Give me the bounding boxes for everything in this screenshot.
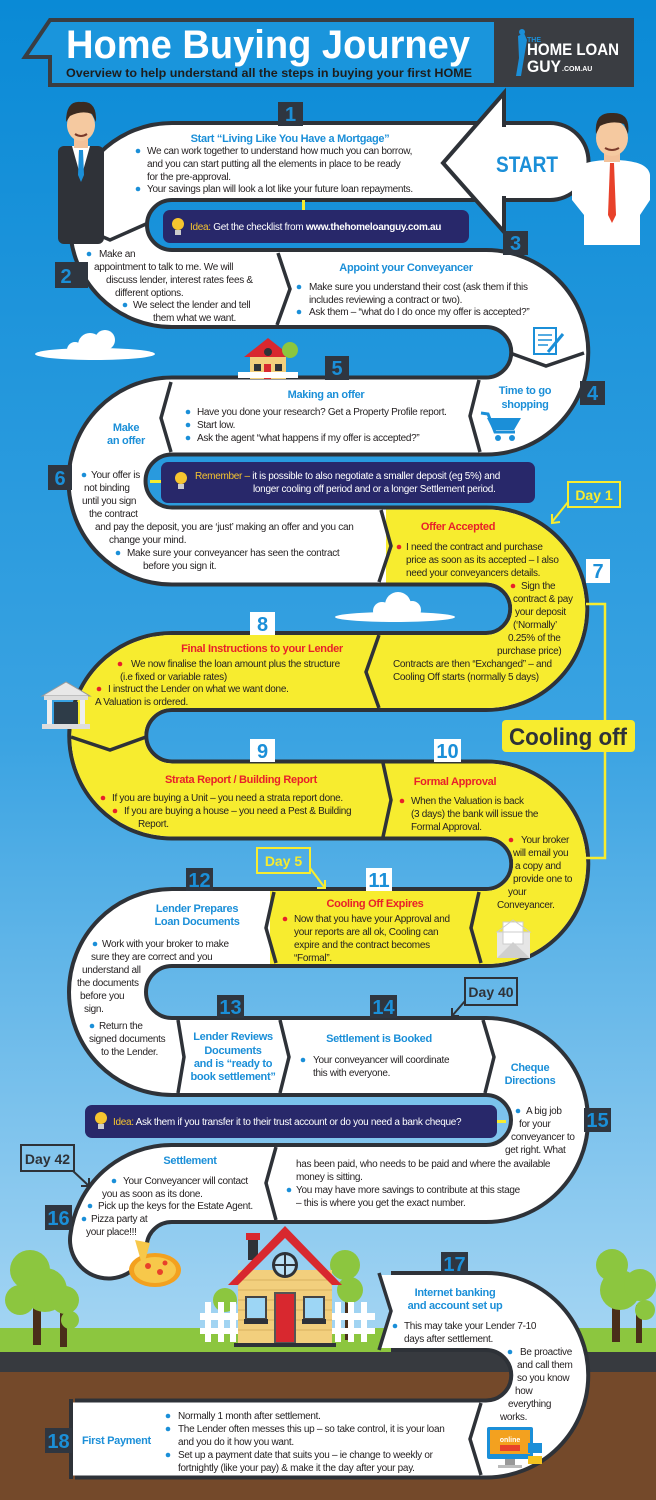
step 7 text: offer accepted: (‘Normally’ — [513, 620, 557, 631]
logo: the home loan guy: .COM.AU — [562, 66, 592, 73]
step 15 text: A big job — [526, 1106, 562, 1117]
number tags: 7 — [592, 561, 604, 583]
number tags: 13 — [219, 997, 242, 1019]
step 5 text: Ask the agent “what happens if my offer is accepted?” — [197, 433, 419, 444]
step 6 text: change your mind. — [109, 535, 186, 546]
step 18 text: Normally 1 month after settlement. — [178, 1411, 321, 1422]
ground: grass, road and soil — [0, 1328, 656, 1500]
step 3 text: Ask them – “what do I do once my offer is accepted?” — [309, 307, 529, 318]
step 17 text: so you know — [517, 1373, 570, 1384]
step 7 text: offer accepted: price as soon as its accepted – I also — [406, 555, 559, 566]
icon: house with fence — [200, 1226, 375, 1347]
icon: pizza — [129, 1240, 181, 1287]
step 2 text: Make an — [99, 249, 135, 260]
step 2 text: discuss lender, interest rates fees & — [106, 275, 253, 286]
subtitle: Overview to help understand all the steps in buying your first HOME — [66, 66, 472, 80]
icon: bank — [42, 682, 90, 729]
step 12 text: to the Lender. — [101, 1047, 158, 1058]
step 12 text: signed documents — [89, 1034, 166, 1045]
icon: shopping cart — [481, 413, 521, 441]
step 16 text: Pizza party at — [91, 1214, 148, 1225]
number tags: 8 — [257, 614, 268, 636]
step 18 text: and you do it how you want. — [178, 1437, 294, 1448]
number tags: 4 — [587, 383, 599, 405]
step 9 text: If you are buying a Unit – you need a strata report done. — [112, 793, 343, 804]
step 17 text: how — [515, 1386, 534, 1397]
step 12 text: Return the — [99, 1021, 143, 1032]
icon: online pay monitor: online — [500, 1437, 520, 1444]
START arrow — [443, 93, 558, 232]
idea box 2 — [85, 1105, 506, 1138]
step 6 text: before you sign it. — [143, 561, 216, 572]
step 12 text: sign. — [84, 1004, 104, 1015]
header banner — [25, 20, 632, 85]
step 11 text — [283, 898, 450, 964]
step 1 text: Start “Living Like You Have a Mortgage” — [191, 133, 389, 145]
step 13 text: Lender Reviews — [193, 1031, 273, 1043]
number tags: 18 — [47, 1431, 70, 1453]
winding road — [69, 162, 584, 1479]
step 7 text: offer accepted: Sign the — [521, 581, 556, 592]
step 3 text — [297, 262, 529, 318]
step 12 text: Work with your broker to make — [102, 939, 229, 950]
cooling off bracket — [502, 604, 635, 858]
step 2 text: them what we want. — [153, 313, 236, 324]
make an offer label: Make — [113, 422, 139, 434]
step 4 label: shopping — [501, 399, 549, 411]
step 11 text: Now that you have your Approval and — [294, 914, 450, 925]
number tags: 9 — [257, 741, 268, 763]
remember box — [150, 462, 535, 503]
step 10 text: Formal Approval. — [411, 822, 482, 833]
step 6 text: and pay the deposit, you are ‘just’ making an offer and you can — [95, 522, 354, 533]
step 9 text — [101, 774, 351, 830]
step 18 text: Set up a payment date that suits you – ie change to weekly or — [178, 1450, 434, 1461]
step 12 text: Lender Prepares — [156, 903, 238, 915]
number tags: 15 — [586, 1110, 609, 1132]
step 10 text: a copy and — [515, 861, 561, 872]
step 8 text: Final Instructions to your Lender — [181, 643, 344, 655]
step 11 text: expire and the contract becomes — [294, 940, 430, 951]
step 10 text: (3 days) the bank will issue the — [411, 809, 539, 820]
step 15 text: for your — [519, 1119, 551, 1130]
step 10 text: provide one to — [513, 874, 573, 885]
logo: the home loan guy: HOME LOAN — [527, 40, 619, 59]
step 3 text: Appoint your Conveyancer — [339, 262, 474, 274]
step 6 text — [82, 470, 354, 572]
step 1 text — [136, 133, 413, 195]
step 15 text: has been paid, who needs to be paid and where the available — [296, 1159, 551, 1170]
step 12 text: Loan Documents — [154, 916, 240, 928]
step 17 text: and call them — [517, 1360, 573, 1371]
START arrow: START — [496, 152, 558, 177]
step 2 text: appointment to talk to me. We will — [94, 262, 233, 273]
idea box 2: Idea: Ask them if you transfer it to their trust account or do you need a bank cheque? — [113, 1117, 462, 1128]
step 15 heading: Cheque — [511, 1062, 549, 1074]
trees — [5, 1249, 656, 1347]
step 13 text: Documents — [204, 1045, 262, 1057]
step 10 text: your — [508, 887, 527, 898]
step 8 text — [95, 643, 344, 708]
day callouts: Day 42 — [25, 1151, 70, 1167]
step 10 text: Formal Approval — [414, 776, 496, 788]
step 16 text: Settlement — [163, 1155, 217, 1167]
step 10 text: Your broker — [521, 835, 570, 846]
step 16 text: you as soon as its done. — [102, 1189, 203, 1200]
step 7 text: offer accepted: your deposit — [515, 607, 566, 618]
number tags: 10 — [436, 741, 459, 763]
day callouts — [21, 482, 620, 1186]
logo: the home loan guy — [516, 29, 619, 76]
step 18 text: fortnightly (like your pay) & make it the day after your pay. — [178, 1463, 415, 1474]
step 6 text: Your offer is — [91, 470, 140, 481]
day callouts: Day 1 — [575, 487, 613, 503]
step 5 text: Have you done your research? Get a Property Profile report. — [197, 407, 447, 418]
step 18 text: First Payment — [82, 1435, 151, 1447]
step 17 text: Be proactive — [520, 1347, 573, 1358]
step 9 text: Strata Report / Building Report — [165, 774, 318, 786]
step 7 text: offer accepted: 0.25% of the — [508, 633, 561, 644]
step 5 text: Start low. — [197, 420, 235, 431]
step 2 text — [87, 249, 253, 324]
number tags: 17 — [443, 1254, 466, 1276]
step 11 text: your reports are all ok, Cooling can — [294, 927, 438, 938]
number tags: 6 — [54, 468, 66, 490]
step 5 text — [186, 389, 447, 444]
remember box: Remember – it is possible to also negotiate a smaller deposit (eg 5%) and — [195, 471, 500, 482]
step 12 text: the documents — [77, 978, 139, 989]
icon: envelope — [497, 920, 530, 958]
icon: document with pen — [534, 328, 563, 354]
step 6 text: Make sure your conveyancer has seen the contract — [127, 548, 340, 559]
step 6 text: until you sign — [82, 496, 136, 507]
number tags: 16 — [47, 1208, 70, 1230]
step 3 text: includes reviewing a contract or two). — [309, 295, 462, 306]
step 2 text: different options. — [115, 288, 183, 299]
number tags: 14 — [372, 997, 395, 1019]
step 1 text: We can work together to understand how much you can borrow, — [147, 146, 412, 157]
step 10 text: Conveyancer. — [497, 900, 555, 911]
step 4 label — [499, 385, 552, 411]
icon: businessman right — [572, 113, 650, 245]
step 13 text: book settlement” — [190, 1071, 276, 1083]
step 11 text: Cooling Off Expires — [327, 898, 424, 910]
step 17 text: and account set up — [408, 1300, 503, 1312]
make an offer label: an offer — [107, 435, 146, 447]
step 16 text: Your Conveyancer will contact — [123, 1176, 248, 1187]
number tags: 12 — [188, 870, 211, 892]
step 13 text — [190, 1031, 276, 1083]
step 7 text: offer accepted: need your conveyancers details. — [406, 568, 540, 579]
step 15 text: You may have more savings to contribute at this stage — [296, 1185, 521, 1196]
remember box: longer cooling off period and or a longer Settlement period. — [253, 484, 496, 495]
number tags: 5 — [331, 358, 343, 380]
step 7 text: offer accepted: purchase price) — [497, 646, 561, 657]
step 7 text: offer accepted: contract & pay — [513, 594, 573, 605]
icon: small house — [238, 338, 298, 379]
step 15 text: get right. What — [505, 1145, 566, 1156]
logo: the home loan guy: GUY — [527, 57, 562, 76]
step 12 text: before you — [80, 991, 124, 1002]
step 17 text — [393, 1287, 573, 1423]
step 8 text: We now finalise the loan amount plus the structure — [131, 659, 341, 670]
step 17 text: days after settlement. — [404, 1334, 493, 1345]
step 7 text: offer accepted — [393, 521, 573, 683]
step 4 label: Time to go — [499, 385, 552, 397]
step 13 text: and is “ready to — [194, 1058, 273, 1070]
step 12 text: sure they are correct and you — [91, 952, 212, 963]
icon: online pay monitor — [487, 1427, 542, 1468]
step 15 heading: Directions — [505, 1075, 556, 1087]
step 10 text — [400, 776, 573, 911]
step 17 text: Internet banking — [415, 1287, 495, 1299]
day callouts: Day 40 — [468, 984, 514, 1000]
number tags: 1 — [285, 104, 296, 126]
step 14 text: this with everyone. — [313, 1068, 390, 1079]
step 8 text: A Valuation is ordered. — [95, 697, 188, 708]
step 6 text: not binding — [84, 483, 130, 494]
number tags: 2 — [60, 266, 72, 288]
step 3 text: Make sure you understand their cost (ask them if this — [309, 282, 528, 293]
step 6 text: the contract — [89, 509, 138, 520]
idea box 1: Idea: Get the checklist from www.thehomeloanguy.com.au — [190, 222, 441, 233]
make an offer label — [107, 422, 146, 447]
step 1 text: and you can start putting all the elements in place to be ready — [147, 159, 401, 170]
idea box 1 — [163, 200, 469, 243]
step 17 text: everything — [508, 1399, 551, 1410]
step 10 text: When the Valuation is back — [411, 796, 525, 807]
step 7 text: offer accepted: Offer Accepted — [421, 521, 495, 533]
step 16 text: Pick up the keys for the Estate Agent. — [98, 1201, 253, 1212]
step 16 text — [82, 1155, 253, 1238]
step 1 text: for the pre-approval. — [147, 172, 231, 183]
step 9 text: If you are buying a house – you need a Pest & Building — [124, 806, 351, 817]
step 15 text — [287, 1106, 575, 1209]
step 7 text: offer accepted: Contracts are then “Exchanged” – and — [393, 659, 552, 670]
step 14 text — [301, 1033, 450, 1079]
step 12 text — [77, 903, 240, 1058]
step 15 text: – this is where you get the exact number. — [296, 1198, 465, 1209]
step 15 text: money is sitting. — [296, 1172, 363, 1183]
step 1 text: Your savings plan will look a lot like your future loan repayments. — [147, 184, 413, 195]
number tags: 3 — [510, 233, 521, 255]
logo: the home loan guy: THE — [527, 37, 541, 44]
step 12 text: understand all — [82, 965, 141, 976]
cloud left — [35, 330, 155, 360]
step 14 text: Settlement is Booked — [326, 1033, 432, 1045]
step 16 text: your place!!! — [86, 1227, 137, 1238]
step 9 text: Report. — [138, 819, 169, 830]
step 7 text: offer accepted: Cooling Off starts (normally 5 days) — [393, 672, 539, 683]
number tags: 11 — [368, 870, 390, 892]
step 18 text: The Lender often messes this up – so take control, it is your loan — [178, 1424, 444, 1435]
step 15 heading — [505, 1062, 556, 1087]
cooling off bracket: Cooling off — [509, 724, 628, 751]
step 14 text: Your conveyancer will coordinate — [313, 1055, 450, 1066]
cloud middle — [335, 592, 455, 622]
step 5 text: Making an offer — [288, 389, 365, 401]
step 8 text: (i.e fixed or variable rates) — [120, 672, 227, 683]
icon: businessman left — [58, 102, 104, 244]
step 7 text: offer accepted: I need the contract and purchase — [406, 542, 543, 553]
step 18 text — [82, 1411, 444, 1474]
step 11 text: “Formal”. — [294, 953, 332, 964]
title: Home Buying Journey — [66, 23, 471, 67]
step 15 text: conveyancer to — [511, 1132, 575, 1143]
step 17 text: This may take your Lender 7-10 — [404, 1321, 537, 1332]
day callouts: Day 5 — [265, 853, 302, 869]
step 10 text: will email you — [512, 848, 568, 859]
number tags — [45, 102, 611, 1453]
step 17 text: works. — [499, 1412, 527, 1423]
step 8 text: I instruct the Lender on what we want done. — [108, 684, 289, 695]
step 2 text: We select the lender and tell — [133, 300, 250, 311]
